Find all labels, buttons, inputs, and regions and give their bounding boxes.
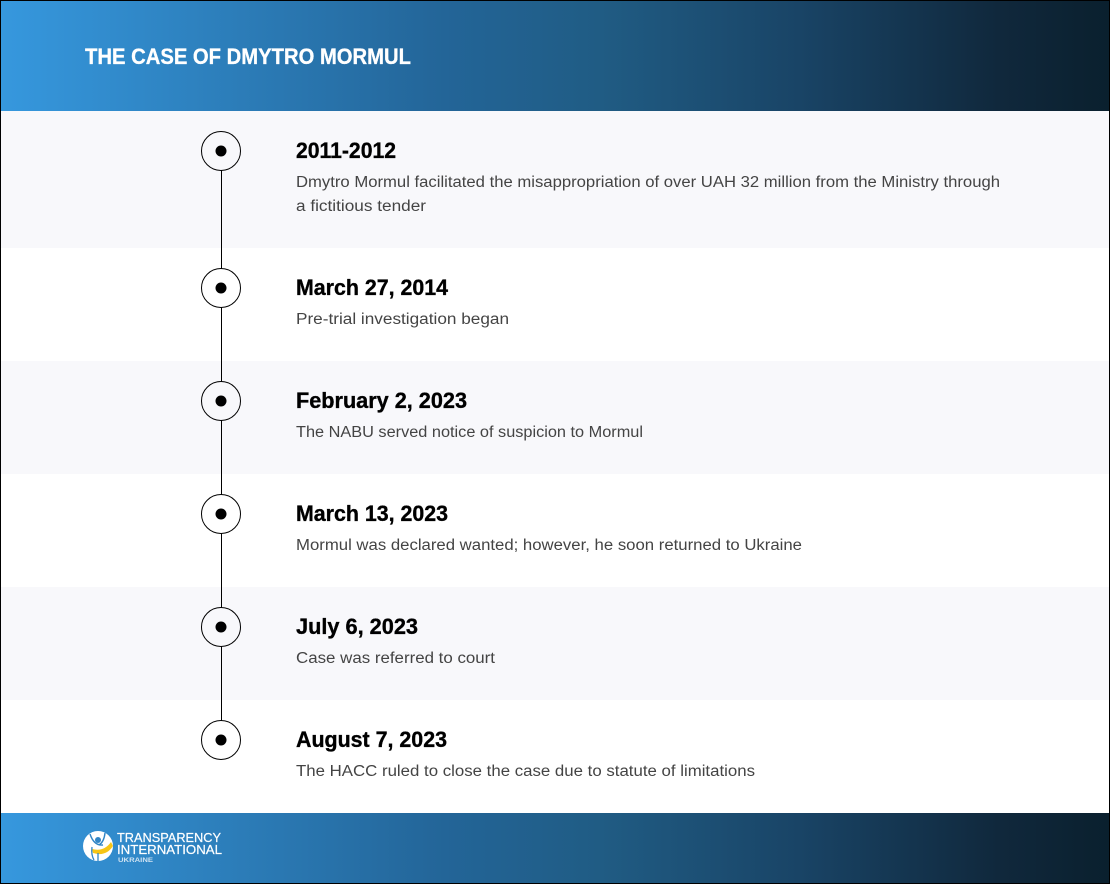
date: March 13, 2023 bbox=[296, 501, 448, 526]
logo: Transparency International Ukraine: INTERNATIONAL bbox=[117, 843, 222, 857]
timeline entry: July 6, 2023 bbox=[202, 608, 496, 667]
timeline connector line bbox=[220, 151, 222, 740]
row backgrounds bbox=[0, 111, 1110, 700]
marker bbox=[202, 268, 240, 308]
description: Mormul was declared wanted; however, he soon returned to Ukraine bbox=[296, 537, 802, 554]
logo text: TRANSPARENCY bbox=[117, 831, 222, 845]
date: August 7, 2023 bbox=[296, 727, 447, 752]
marker bbox=[202, 720, 240, 760]
title: THE CASE OF DMYTRO MORMUL bbox=[85, 44, 411, 69]
timeline entry: March 27, 2014 bbox=[202, 268, 509, 328]
marker bbox=[202, 382, 240, 420]
date: 2011-2012 bbox=[296, 138, 396, 163]
timeline entry: August 7, 2023 bbox=[202, 720, 755, 780]
description: a fictitious tender bbox=[296, 198, 426, 215]
date: July 6, 2023 bbox=[296, 614, 418, 639]
description bbox=[296, 174, 1000, 215]
marker bbox=[202, 494, 240, 534]
description: Pre-trial investigation began bbox=[296, 311, 509, 328]
description: Dmytro Mormul facilitated the misappropriation of over UAH 32 million from the Ministry through bbox=[296, 174, 1000, 191]
timeline entry: March 13, 2023 bbox=[202, 494, 802, 554]
timeline entry: 2011-2012 bbox=[202, 132, 1000, 215]
description: The NABU served notice of suspicion to Mormul bbox=[296, 424, 643, 441]
description: The HACC ruled to close the case due to statute of limitations bbox=[296, 763, 755, 780]
footer banner bbox=[0, 813, 1110, 884]
marker bbox=[202, 132, 240, 170]
date: March 27, 2014 bbox=[296, 275, 449, 300]
marker bbox=[202, 608, 240, 646]
logo: Transparency International Ukraine bbox=[83, 831, 222, 864]
logo: Transparency International Ukraine: UKRAINE bbox=[118, 857, 154, 864]
date: February 2, 2023 bbox=[296, 388, 467, 413]
icon: globe with figure bbox=[83, 831, 113, 861]
header banner bbox=[0, 0, 1110, 111]
description: Case was referred to court bbox=[296, 650, 496, 667]
timeline entry: February 2, 2023 bbox=[202, 382, 643, 441]
